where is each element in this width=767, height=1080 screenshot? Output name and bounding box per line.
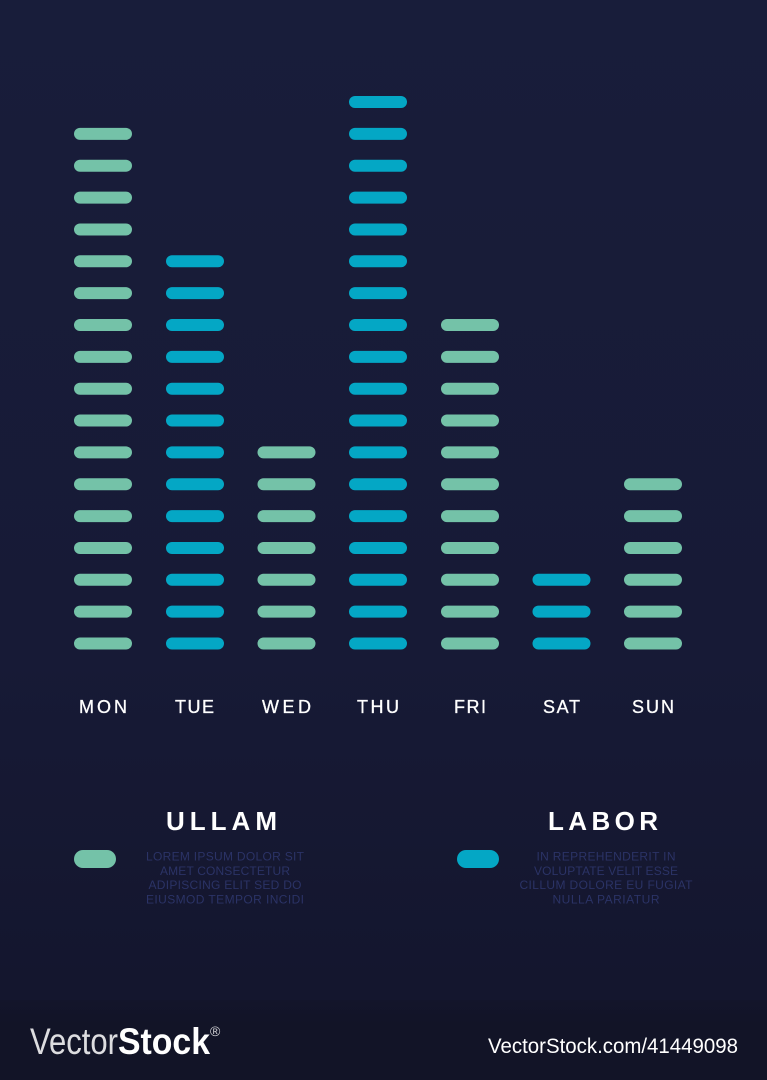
legend swatch: blue <box>457 850 499 868</box>
bar chart <box>74 96 682 650</box>
legend text: Ullam: EIUSMOD TEMPOR INCIDI <box>146 892 304 906</box>
day labels: FRI <box>454 697 486 717</box>
legend text: Ullam <box>146 850 305 906</box>
day labels: TUE <box>175 697 214 717</box>
legend text: Labor: IN REPREHENDERIT IN <box>536 850 676 864</box>
footer logo: VectorStock <box>30 1021 210 1062</box>
column: Thursday, 18 segments <box>349 96 407 650</box>
legend text: Labor: VOLUPTATE VELIT ESSE <box>534 864 678 878</box>
legend text: Ullam: LOREM IPSUM DOLOR SIT <box>146 850 305 864</box>
column: Friday, 11 segments <box>441 319 499 650</box>
day labels: SAT <box>543 697 580 717</box>
legend swatch: green <box>74 850 116 868</box>
footer logo: VectorStock: Vector <box>30 1021 118 1062</box>
day labels <box>79 697 674 717</box>
legend text: Labor: NULLA PARIATUR <box>552 892 660 906</box>
day labels: WED <box>262 697 311 717</box>
column: Wednesday, 7 segments <box>258 446 316 650</box>
day labels: THU <box>357 697 399 717</box>
day labels: MON <box>79 697 127 717</box>
footer logo: VectorStock: Stock <box>118 1021 210 1062</box>
legend: Ullam <box>74 806 305 906</box>
legend text: Ullam: ADIPISCING ELIT SED DO <box>148 878 302 892</box>
column: Sunday, 6 segments <box>624 478 682 650</box>
legend text: Labor <box>520 850 693 906</box>
footer image id: VectorStock.com/41449098 <box>488 1035 738 1058</box>
column: Saturday, 3 segments <box>532 574 590 650</box>
column: Tuesday, 13 segments <box>166 255 224 650</box>
legend text: Ullam: AMET CONSECTETUR <box>160 864 290 878</box>
legend text: Labor: CILLUM DOLORE EU FUGIAT <box>520 878 693 892</box>
footer band <box>0 1000 767 1080</box>
legend: Labor <box>457 806 693 906</box>
column: Monday, 17 segments <box>74 128 132 649</box>
day labels: SUN <box>632 697 674 717</box>
registered mark: ® <box>210 1023 221 1039</box>
heading: Ullam: ULLAM <box>166 806 277 836</box>
heading: Labor: LABOR <box>548 806 658 836</box>
